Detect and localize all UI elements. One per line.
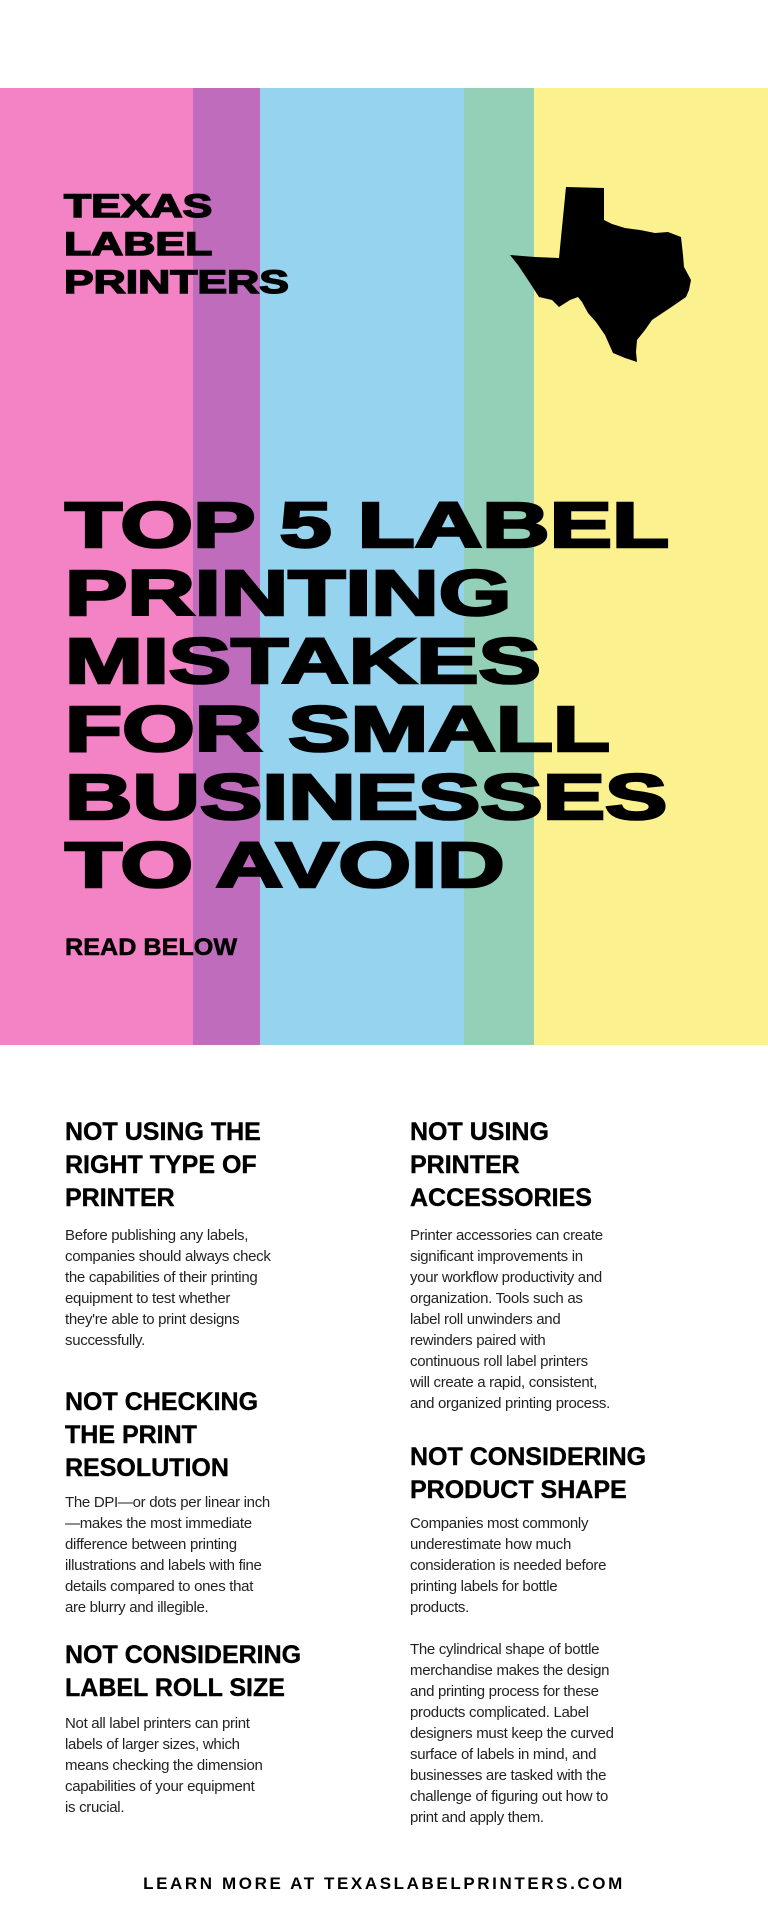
text: print resolution: The DPI—or dots per linear inch: [65, 1494, 270, 1511]
text: product shape: surface of labels in mind, and: [410, 1746, 596, 1763]
heading: printer accessories: PRINTER: [410, 1151, 520, 1179]
text: right type of printer: successfully.: [65, 1332, 145, 1349]
read below: READ BELOW: [65, 934, 237, 961]
heading: label roll size: NOT CONSIDERING: [65, 1641, 301, 1669]
main title: [64, 489, 669, 901]
text: right type of printer: companies should always check: [65, 1248, 271, 1265]
heading: product shape: PRODUCT SHAPE: [410, 1476, 627, 1504]
footer: LEARN MORE AT TEXASLABELPRINTERS.COM: [143, 1874, 625, 1893]
heading: product shape: [410, 1443, 646, 1504]
brand name: TEXAS: [64, 188, 212, 224]
text: printer accessories: Printer accessories can create: [410, 1227, 603, 1244]
main title: FOR SMALL: [65, 693, 610, 765]
text: print resolution: are blurry and illegible.: [65, 1599, 208, 1616]
text: printer accessories: [410, 1227, 610, 1412]
icon: texas map: [510, 187, 691, 362]
text: label roll size: capabilities of your equipment: [65, 1778, 254, 1795]
brand name: PRINTERS: [64, 264, 289, 300]
main title: BUSINESSES: [65, 761, 667, 833]
text: printer accessories: organization. Tools such as: [410, 1290, 583, 1307]
main title: MISTAKES: [65, 625, 541, 697]
heading: not checking print resolution: RESOLUTION: [65, 1454, 229, 1482]
text: print resolution: [65, 1494, 270, 1616]
heading: not using the right type of printer: RIGHT TYPE OF: [65, 1151, 257, 1179]
text: print resolution: illustrations and labels with fine: [65, 1557, 262, 1574]
heading: not using the right type of printer: [65, 1118, 261, 1212]
text: right type of printer: they're able to print designs: [65, 1311, 239, 1328]
main title: TOP 5 LABEL: [65, 489, 669, 561]
heading: label roll size: LABEL ROLL SIZE: [65, 1674, 285, 1702]
heading: product shape: NOT CONSIDERING: [410, 1443, 646, 1471]
text: printer accessories: continuous roll label printers: [410, 1353, 588, 1370]
text: label roll size: is crucial.: [65, 1799, 124, 1816]
text: printer accessories: rewinders paired with: [410, 1332, 545, 1349]
text: right type of printer: [65, 1227, 271, 1349]
text: product shape: printing labels for bottle: [410, 1578, 557, 1595]
text: product shape: merchandise makes the design: [410, 1662, 609, 1679]
heading: printer accessories: NOT USING: [410, 1118, 549, 1146]
text: printer accessories: your workflow productivity and: [410, 1269, 602, 1286]
brand name: LABEL: [64, 226, 212, 262]
text: product shape: businesses are tasked with the: [410, 1767, 606, 1784]
text: printer accessories: will create a rapid, consistent,: [410, 1374, 597, 1391]
text: product shape: designers must keep the curved: [410, 1725, 614, 1742]
heading: not using the right type of printer: NOT USING THE: [65, 1118, 261, 1146]
heading: printer accessories: [410, 1118, 592, 1212]
text: label roll size: [65, 1715, 263, 1816]
main title: PRINTING: [65, 557, 511, 629]
text: product shape: [410, 1515, 614, 1826]
text: label roll size: means checking the dimension: [65, 1757, 263, 1774]
text: print resolution: difference between printing: [65, 1536, 237, 1553]
text: print resolution: —makes the most immediate: [65, 1515, 252, 1532]
text: right type of printer: equipment to test whether: [65, 1290, 230, 1307]
text: product shape: Companies most commonly: [410, 1515, 588, 1532]
main title: TO AVOID: [65, 829, 505, 901]
text: printer accessories: and organized printing process.: [410, 1395, 610, 1412]
heading: not checking print resolution: THE PRINT: [65, 1421, 197, 1449]
text: right type of printer: the capabilities of their printing: [65, 1269, 257, 1286]
text: product shape: underestimate how much: [410, 1536, 571, 1553]
text: product shape: and printing process for these: [410, 1683, 599, 1700]
text: product shape: products complicated. Label: [410, 1704, 589, 1721]
banner: colored stripes: [0, 88, 768, 1045]
text: product shape: consideration is needed before: [410, 1557, 606, 1574]
heading: label roll size: [65, 1641, 301, 1702]
text: print resolution: details compared to ones that: [65, 1578, 253, 1595]
text: product shape: challenge of figuring out how to: [410, 1788, 608, 1805]
text: label roll size: Not all label printers can print: [65, 1715, 250, 1732]
heading: printer accessories: ACCESSORIES: [410, 1184, 592, 1212]
text: product shape: The cylindrical shape of bottle: [410, 1641, 599, 1658]
heading: not using the right type of printer: PRINTER: [65, 1184, 175, 1212]
brand name: [64, 188, 289, 300]
text: printer accessories: significant improvements in: [410, 1248, 583, 1265]
text: right type of printer: Before publishing any labels,: [65, 1227, 248, 1244]
text: product shape: products.: [410, 1599, 469, 1616]
text: product shape: print and apply them.: [410, 1809, 544, 1826]
heading: not checking print resolution: NOT CHECKING: [65, 1388, 258, 1416]
heading: not checking print resolution: [65, 1388, 258, 1482]
text: label roll size: labels of larger sizes, which: [65, 1736, 240, 1753]
text: printer accessories: label roll unwinders and: [410, 1311, 560, 1328]
